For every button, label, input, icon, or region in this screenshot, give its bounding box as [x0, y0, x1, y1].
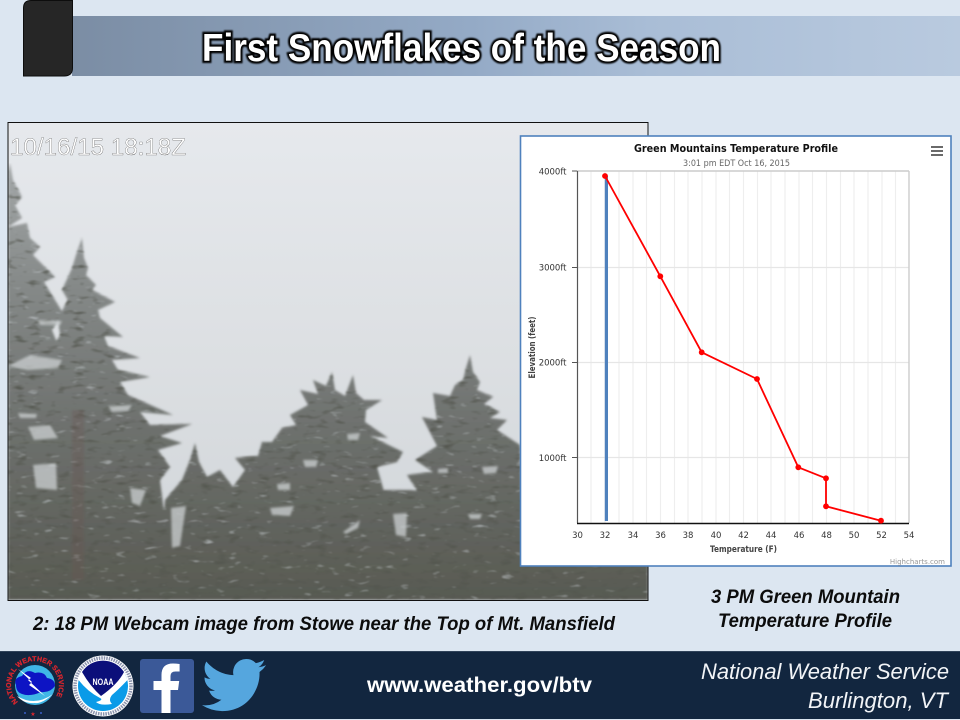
y axis labels: 1000ft: [539, 454, 567, 464]
chart title: Green Mountains Temperature Profile: [634, 143, 838, 155]
y axis labels: [539, 168, 567, 464]
x axis labels: 30: [572, 531, 583, 541]
panel: temperature profile chart: [520, 136, 951, 566]
icon: NOAA logo: NOAA: [92, 677, 114, 688]
title: First Snowflakes of the Season: [202, 27, 721, 70]
freezing line: [605, 176, 608, 521]
chart subtitle: 3:01 pm EDT Oct 16, 2015: [683, 159, 790, 169]
icon: menu: [931, 147, 943, 155]
x axis labels: 46: [794, 531, 804, 541]
x axis title: Temperature (F): [710, 545, 777, 555]
y axis labels: 2000ft: [539, 358, 567, 368]
tree: left edge spruce: [8, 163, 80, 600]
tree: middle double-top spruce: [232, 372, 404, 494]
x axis labels: 50: [849, 531, 859, 541]
title: First Snowflakes of the Season: [202, 27, 721, 70]
y axis labels: 4000ft: [539, 168, 567, 178]
highcharts credit: Highcharts.com: [890, 558, 945, 566]
icon: NWS logo: ★: [30, 711, 36, 718]
caption: webcam: 2: 18 PM Webcam image from Stowe near the Top of Mt. Mansfield: [32, 614, 615, 635]
caption: temperature profile: 3 PM Green Mountain: [711, 587, 900, 608]
footer bar: [0, 651, 960, 719]
webcam timestamp: 10/16/15 18:18Z: [10, 134, 186, 161]
x axis labels: 42: [738, 531, 749, 541]
x axis labels: [572, 531, 914, 541]
far tree line: [163, 443, 416, 510]
chart axes: [572, 171, 909, 524]
y axis title: Elevation (feet): [528, 316, 538, 378]
x axis labels: 36: [655, 531, 666, 541]
x axis labels: 52: [876, 531, 887, 541]
x axis labels: 40: [711, 531, 721, 541]
panel: webcam photo: [8, 122, 648, 600]
footer agency name: National Weather Service: [701, 659, 949, 684]
tree: tall center-left spruce: [55, 238, 192, 510]
x axis labels: 48: [821, 531, 832, 541]
caption: temperature profile: Temperature Profile: [718, 611, 892, 632]
x axis labels: 32: [600, 531, 610, 541]
footer agency name: [701, 659, 950, 713]
y axis labels: 3000ft: [539, 264, 567, 274]
chart grid: [577, 171, 909, 523]
trunk: [72, 412, 84, 561]
footer website: www.weather.gov/btv: [366, 674, 592, 697]
sky patches through branches: [8, 320, 498, 548]
icon: NWS logo: NATIONAL WEATHER SERVICE: [6, 656, 64, 705]
ground band: [162, 507, 166, 514]
x axis labels: 38: [683, 531, 693, 541]
x axis labels: 44: [766, 531, 776, 541]
temperature series: [602, 173, 884, 524]
x axis labels: 54: [904, 531, 914, 541]
icon: NOAA logo: [72, 656, 134, 716]
icon: Twitter: [202, 659, 266, 711]
footer agency name: Burlington, VT: [808, 688, 950, 713]
header bar: [24, 0, 960, 76]
icon: Facebook: [140, 659, 194, 713]
x axis labels: 34: [628, 531, 638, 541]
caption: temperature profile: [711, 587, 900, 632]
tree: right tall spruce: [406, 355, 520, 501]
